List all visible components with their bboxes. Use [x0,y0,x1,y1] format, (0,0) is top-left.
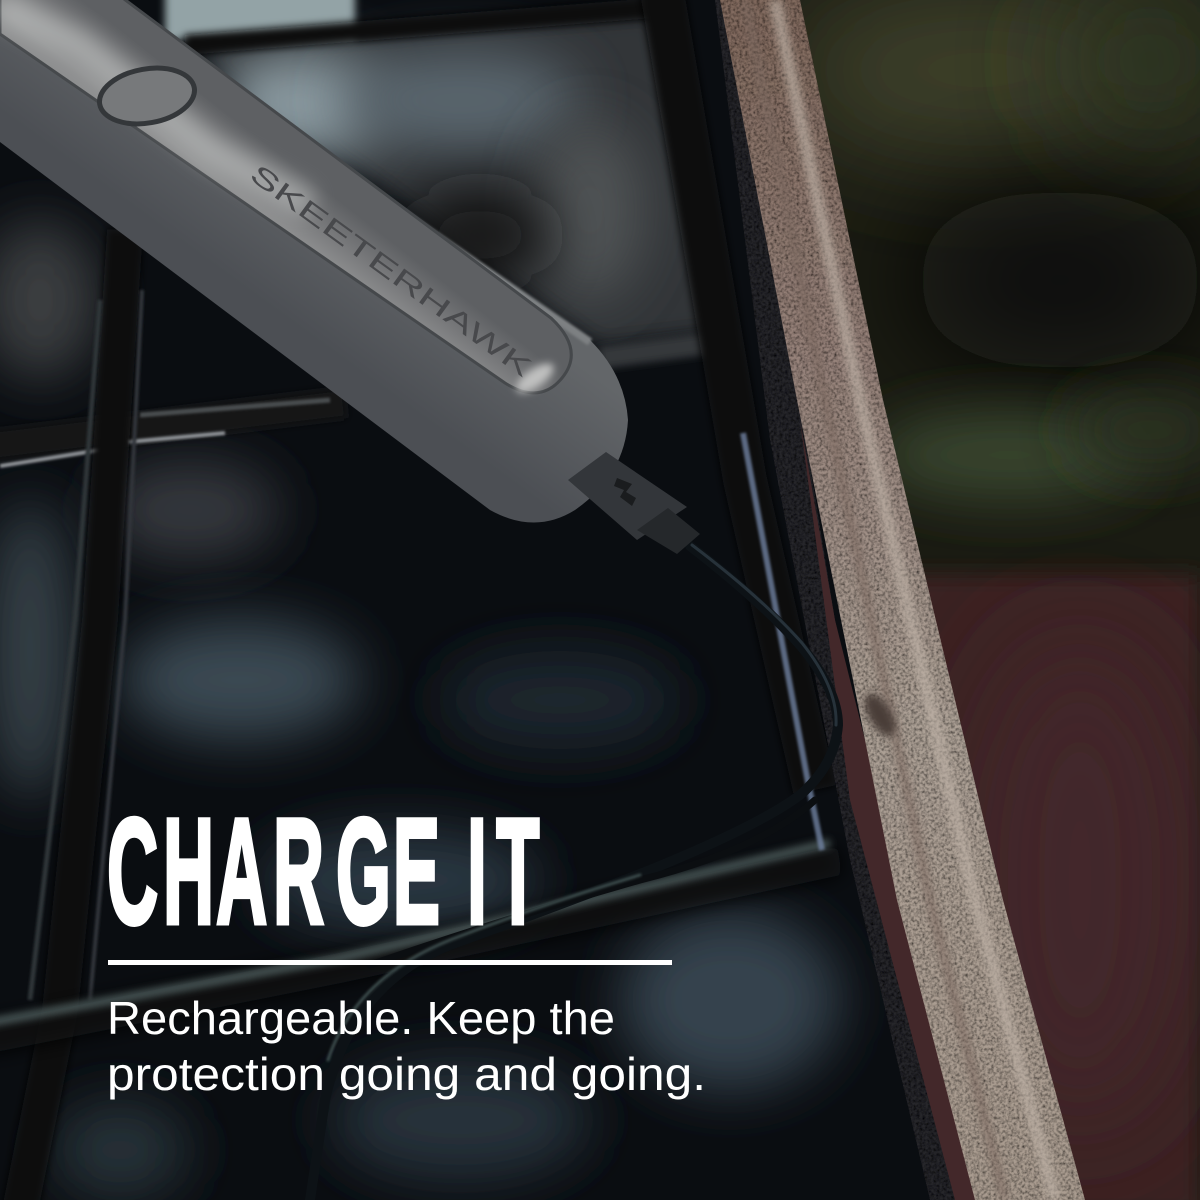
recessed device panel [0,0,571,393]
device button [95,61,199,131]
black tray [0,0,945,1200]
divider line [108,960,672,965]
body text: Rechargeable. Keep the [107,992,615,1044]
blurred garden background [700,0,1200,1200]
foam tray edge [715,0,975,1200]
upper rim of device [92,0,590,342]
device: SkeeterHawk handle [0,0,628,522]
top tray cell reflection [195,12,725,345]
body text [107,992,706,1100]
tray grid ribs [0,0,840,1200]
body text: protection going and going. [107,1048,706,1100]
blue tray highlight [743,433,822,850]
title: CHARGE IT [107,787,539,955]
USB plug [568,452,700,554]
device brand name: SKEETERHAWK [244,159,537,383]
wooden rail [720,0,1085,1200]
charging cable [310,452,838,1200]
